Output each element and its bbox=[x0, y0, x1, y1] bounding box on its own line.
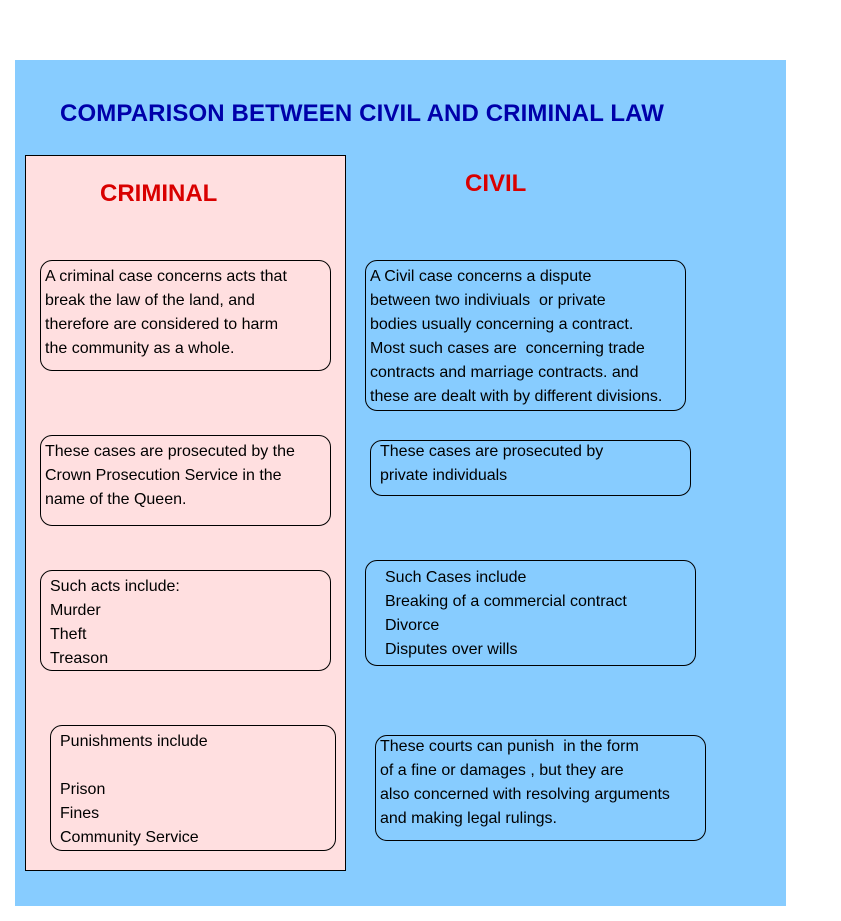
civil box: definition bbox=[365, 260, 686, 411]
civil box: punishments bbox=[375, 735, 706, 841]
criminal text: definition: A criminal case concerns acts that break the law of the land, and therefore are considered to harm the community as a whole. bbox=[45, 268, 287, 357]
panel: criminal column bbox=[25, 155, 346, 871]
criminal box: punishments bbox=[50, 725, 336, 851]
criminal text: examples: Such acts include: Murder Theft Treason bbox=[50, 578, 180, 667]
civil text: examples: Such Cases include Breaking of a commercial contract Divorce Disputes over wills bbox=[385, 569, 627, 658]
criminal text: punishments: Punishments include Prison Fines Community Service bbox=[60, 733, 208, 846]
criminal text: prosecution: These cases are prosecuted by the Crown Prosecution Service in the name of the Queen. bbox=[45, 443, 295, 508]
civil box: examples bbox=[365, 560, 696, 666]
criminal box: definition bbox=[40, 260, 331, 371]
civil text: punishments: These courts can punish in the form of a fine or damages , but they are also concerned with resolving arguments and making legal rulings. bbox=[380, 738, 670, 827]
civil text: definition: A Civil case concerns a dispute between two indiviuals or private bodies usually concerning a contract. Most such cases are concerning trade contracts and marriage contracts. and these are dealt with by different divisions. bbox=[370, 268, 662, 405]
civil box: prosecution bbox=[370, 440, 691, 496]
heading: criminal: CRIMINAL bbox=[100, 180, 217, 207]
title: COMPARISON BETWEEN CIVIL AND CRIMINAL LAW bbox=[60, 100, 664, 127]
heading: civil: CIVIL bbox=[465, 170, 526, 197]
criminal box: examples bbox=[40, 570, 331, 671]
criminal box: prosecution bbox=[40, 435, 331, 526]
civil text: prosecution: These cases are prosecuted by private individuals bbox=[380, 443, 603, 484]
